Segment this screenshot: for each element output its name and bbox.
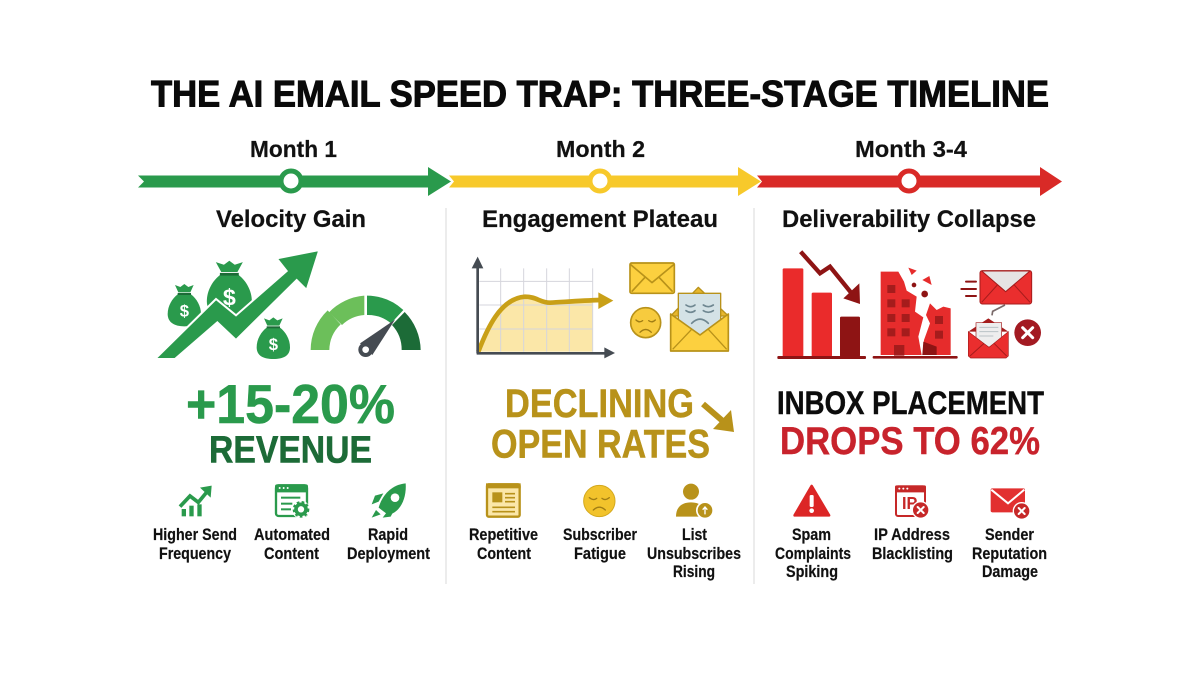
icon: open envelope with sad letter <box>671 287 728 351</box>
stat: declining open rates <box>491 382 710 466</box>
icon: repetitive content <box>486 483 521 517</box>
label: sender reputation damage: Damage <box>982 563 1038 581</box>
icon row: month 2 <box>486 483 714 519</box>
label: higher send frequency: Frequency <box>159 545 232 563</box>
marker: month 1 <box>281 171 301 191</box>
stat: drops to 62%: DROPS TO 62% <box>780 420 1040 463</box>
label: sender reputation damage: Reputation <box>972 545 1047 563</box>
label: rapid deployment: Rapid <box>368 526 408 544</box>
heading: velocity gain: Velocity Gain <box>216 206 366 233</box>
label: list unsubscribes rising: List <box>682 526 707 544</box>
label: IP address blacklisting: Blacklisting <box>872 545 953 563</box>
heading: engagement plateau: Engagement Plateau <box>482 206 718 233</box>
label: subscriber fatigue: Subscriber <box>563 526 637 544</box>
stat: +15-20%: +15-20% <box>186 373 395 435</box>
chart: plateau curve <box>472 257 615 358</box>
label: automated content: Automated <box>254 526 330 544</box>
panel: velocity gain <box>153 206 430 563</box>
panel: deliverability collapse <box>775 206 1047 581</box>
icon: subscriber fatigue <box>584 485 615 517</box>
labels: month 2 items <box>469 526 741 581</box>
icon: closed envelope <box>630 263 674 293</box>
icon: speed gauge <box>311 296 421 357</box>
stat: inbox placement: INBOX PLACEMENT <box>777 385 1044 421</box>
illustration: falling bars, crumbling building and rejected mail <box>777 252 1041 359</box>
label: IP address blacklisting: IP Address <box>874 526 950 544</box>
icon: opened envelope with letter <box>968 318 1008 358</box>
icon: rapid deployment <box>372 483 406 518</box>
month 3-4 label: Month 3-4 <box>855 136 967 162</box>
heading: deliverability collapse: Deliverability Collapse <box>782 206 1036 233</box>
label: repetitive content: Repetitive <box>469 526 538 544</box>
label: list unsubscribes rising: Unsubscribes <box>647 545 741 563</box>
labels: month 3-4 items <box>775 526 1047 581</box>
icon: IP blacklisting: IP <box>902 493 917 513</box>
icon: small money bag right: $ <box>269 335 279 354</box>
label: subscriber fatigue: Fatigue <box>574 545 626 563</box>
label: spam complaints spiking: Spiking <box>786 563 838 581</box>
arrow: red stage <box>757 167 1062 196</box>
label: automated content: Content <box>264 545 319 563</box>
icon row: month 3-4 <box>795 485 1031 520</box>
month 1 label: Month 1 <box>250 136 337 162</box>
month 2 label: Month 2 <box>556 136 645 162</box>
stat line: declining: DECLINING <box>505 382 694 426</box>
icon: small money bag left <box>168 284 201 326</box>
icon: spam warning triangle <box>795 486 829 515</box>
icon: small money bag right <box>257 317 290 359</box>
arrow: yellow stage <box>449 167 761 196</box>
panel: engagement plateau <box>469 206 741 581</box>
stat label: revenue: REVENUE <box>209 430 372 472</box>
icon: rising arrow <box>155 250 319 359</box>
chart: falling bars <box>777 252 866 359</box>
icon: higher send frequency <box>180 486 212 516</box>
icon: IP blacklisting <box>895 485 930 519</box>
illustration: plateau chart and sad emails <box>472 257 728 358</box>
icon: sad face <box>631 308 661 338</box>
marker: month 2 <box>590 171 610 191</box>
labels: month 1 items <box>153 526 430 563</box>
title: THE AI EMAIL SPEED TRAP: THREE-STAGE TIMELINE <box>151 74 1049 114</box>
arrow: declining <box>703 404 734 432</box>
icon: automated content <box>275 484 310 518</box>
icon: small money bag left: $ <box>180 302 190 321</box>
label: higher send frequency: Higher Send <box>153 526 237 544</box>
icon: sender reputation damage <box>991 488 1031 520</box>
label: sender reputation damage: Sender <box>985 526 1035 544</box>
icon: crumbling building <box>873 268 958 359</box>
label: rapid deployment: Deployment <box>347 545 430 563</box>
label: repetitive content: Content <box>477 545 531 563</box>
icon: list unsubscribes rising <box>676 484 714 519</box>
stat line: open rates: OPEN RATES <box>491 422 710 466</box>
icon: outgoing envelope <box>961 271 1032 315</box>
marker: month 3-4 <box>899 171 919 191</box>
icon: dollar sign on large bag: $ <box>223 284 236 310</box>
label: list unsubscribes rising: Rising <box>673 563 715 581</box>
label: spam complaints spiking: Spam <box>792 526 831 544</box>
icon: rejected mark <box>1014 319 1041 346</box>
illustration: revenue arrow, money bags and gauge <box>155 250 421 359</box>
icon: large money bag <box>207 261 252 318</box>
label: spam complaints spiking: Complaints <box>775 545 851 563</box>
arrow: green stage <box>138 167 451 196</box>
icon row: month 1 <box>180 483 406 518</box>
timeline <box>138 136 1062 196</box>
